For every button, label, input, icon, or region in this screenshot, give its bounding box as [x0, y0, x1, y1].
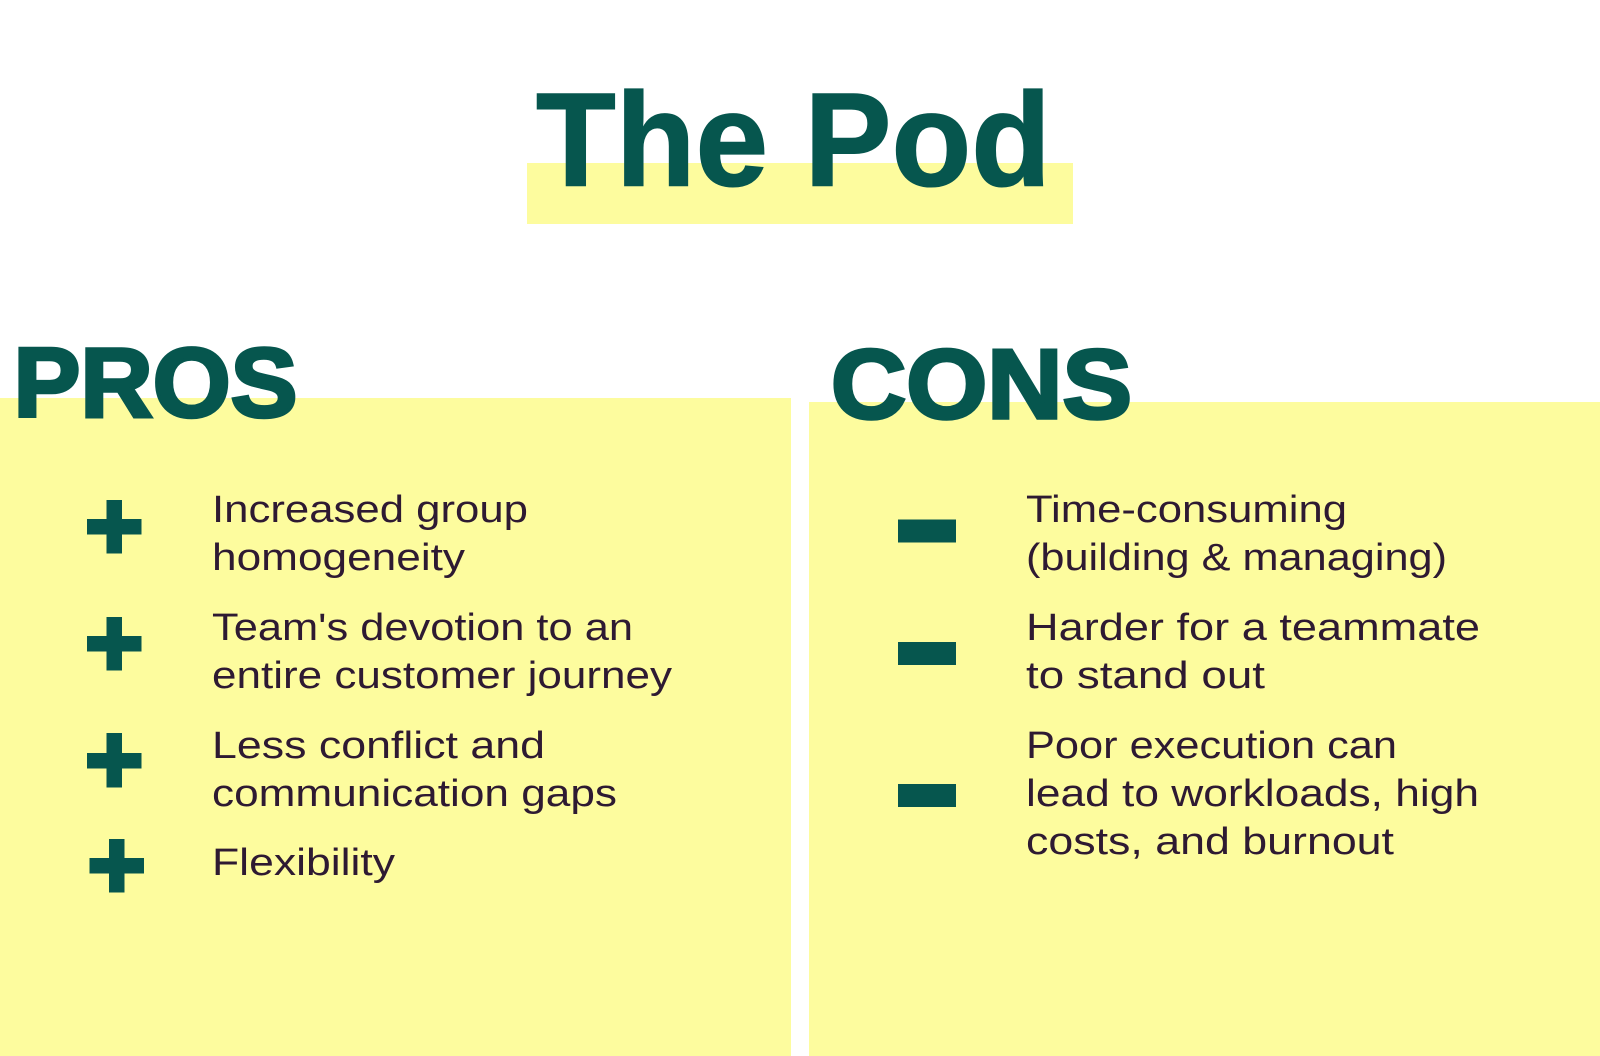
- pro item: flexibility: Flexibility: [212, 842, 395, 884]
- con item: poor execution: Poor execution can: [1026, 725, 1397, 767]
- con item: time-consuming: Time-consuming: [1026, 489, 1347, 531]
- pro item: customer journey: entire customer journey: [212, 655, 672, 697]
- pro item: less conflict: communication gaps: [212, 773, 617, 815]
- con item: harder to stand out: [898, 607, 1480, 697]
- pro item: customer journey: [87, 607, 672, 697]
- title text: The Pod: [536, 66, 1051, 214]
- panel: cons: [809, 329, 1600, 1056]
- con item: harder to stand out: to stand out: [1026, 655, 1266, 697]
- pro item: group homogeneity: [87, 489, 528, 579]
- cons background: [809, 402, 1600, 1056]
- pro item: customer journey: Team's devotion to an: [212, 607, 633, 649]
- pros heading: PROS: [14, 328, 298, 438]
- con item: time-consuming: (building & managing): [1026, 537, 1447, 579]
- cons heading: CONS: [831, 329, 1132, 439]
- title: [527, 66, 1073, 224]
- title highlight bar: [527, 163, 1073, 224]
- con item: time-consuming: [898, 489, 1447, 579]
- pro item: less conflict: Less conflict and: [212, 725, 545, 767]
- pros background: [0, 398, 791, 1056]
- pro item: less conflict: [87, 725, 617, 815]
- pro item: group homogeneity: Increased group: [212, 489, 528, 531]
- con item: poor execution: lead to workloads, high: [1026, 773, 1479, 815]
- con item: harder to stand out: Harder for a teammate: [1026, 607, 1480, 649]
- panel: pros: [0, 328, 791, 1056]
- con item: poor execution: costs, and burnout: [1026, 821, 1395, 863]
- pro item: flexibility: [90, 839, 395, 892]
- pro item: group homogeneity: homogeneity: [212, 537, 465, 579]
- con item: poor execution: [898, 725, 1479, 863]
